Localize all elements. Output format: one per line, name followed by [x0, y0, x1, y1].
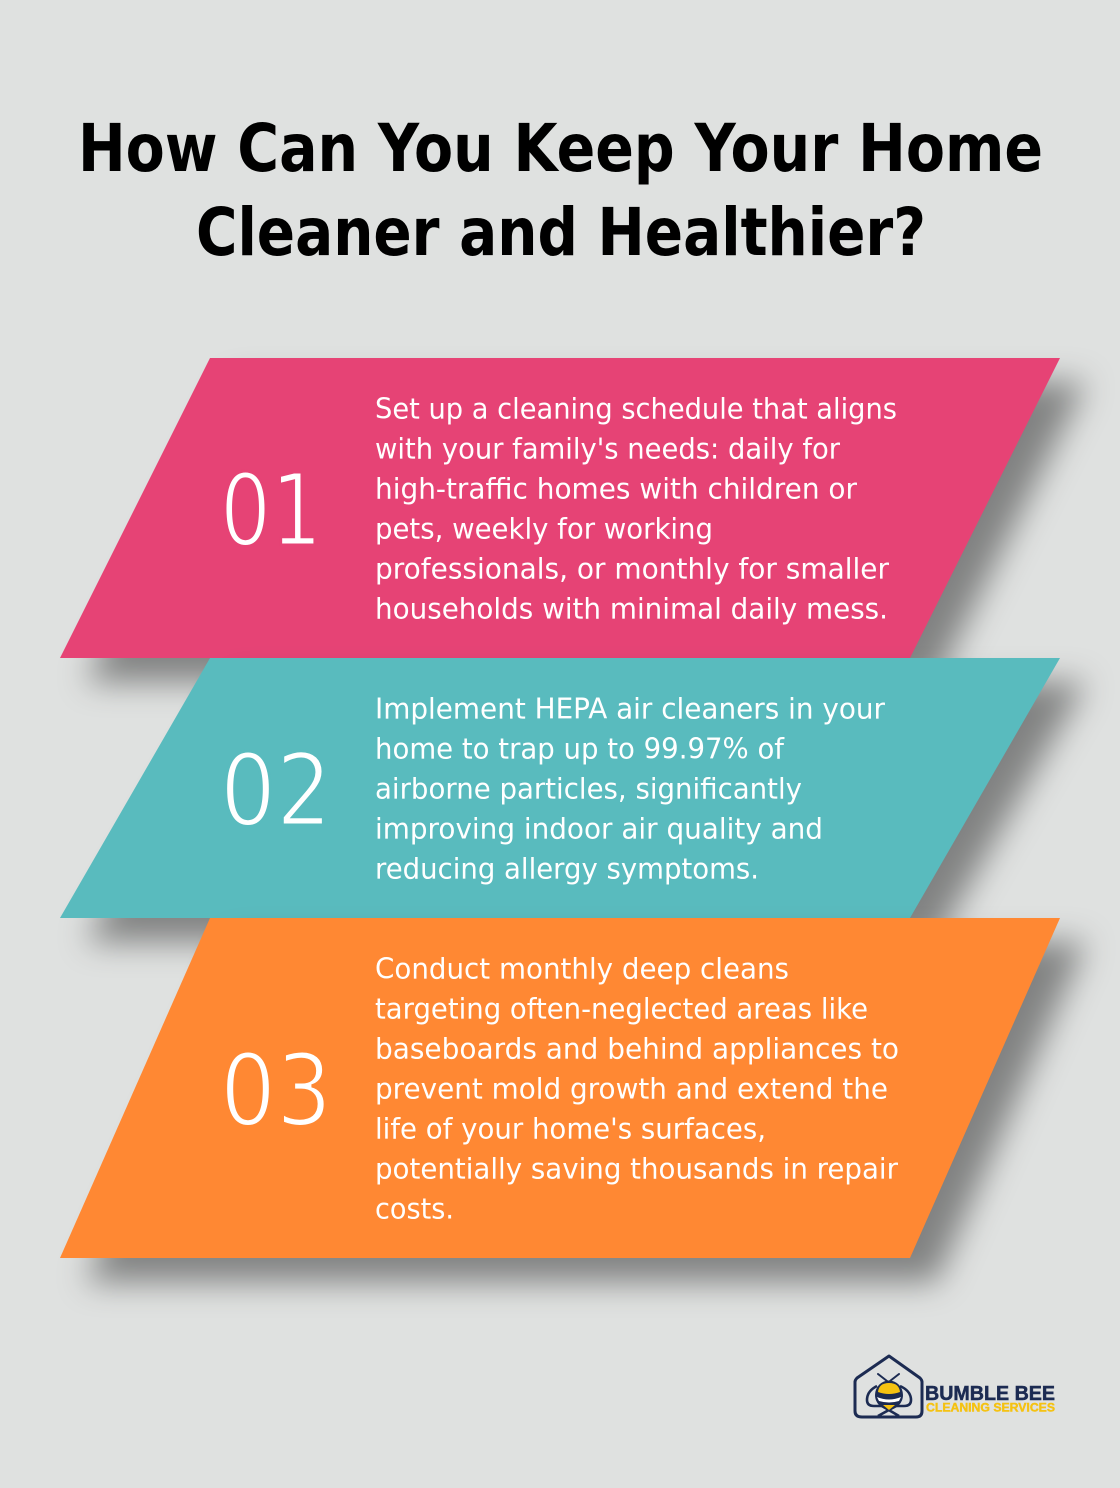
text: step 03: life of your home's surfaces, — [375, 1112, 766, 1146]
text: step 02: home to trap up to 99.97% of — [375, 732, 785, 766]
number 02: 02 — [220, 732, 332, 849]
text: step 01: households with minimal daily mess. — [375, 592, 888, 626]
panel: step 03 — [60, 918, 1086, 1282]
logo: Bumble Bee Cleaning Services — [855, 1356, 1055, 1417]
title: Cleaner and Healthier? — [196, 194, 926, 271]
panel: step 02 — [60, 658, 1086, 942]
number 03: 03 — [220, 1032, 332, 1149]
text: step 02: reducing allergy symptoms. — [375, 852, 759, 886]
text: step 01: high-traffic homes with children or — [375, 472, 857, 506]
panel: step 01 — [60, 358, 1086, 682]
text: step 01: professionals, or monthly for smaller — [375, 552, 889, 586]
text: step 03: Conduct monthly deep cleans — [375, 952, 789, 986]
text: step 03: prevent mold growth and extend the — [375, 1072, 888, 1106]
text: step 01 — [375, 392, 897, 626]
text: step 02: Implement HEPA air cleaners in your — [375, 692, 885, 726]
text: step 01: Set up a cleaning schedule that aligns — [375, 392, 897, 426]
text: step 02: improving indoor air quality and — [375, 812, 823, 846]
number 01: 01 — [220, 452, 322, 569]
title — [78, 110, 1043, 271]
text: step 01: pets, weekly for working — [375, 512, 713, 546]
text: step 03: targeting often-neglected areas like — [375, 992, 868, 1026]
text: step 03: baseboards and behind appliances to — [375, 1032, 899, 1066]
text: step 01: with your family's needs: daily for — [375, 432, 840, 466]
text: step 03: potentially saving thousands in repair — [375, 1152, 898, 1186]
text: step 02 — [375, 692, 885, 886]
icon: house with bee — [855, 1356, 922, 1417]
logo text: BUMBLE BEE — [925, 1383, 1055, 1405]
text: step 03: costs. — [375, 1192, 454, 1226]
text: step 03 — [375, 952, 899, 1226]
logo tagline: CLEANING SERVICES — [926, 1402, 1055, 1414]
text: step 02: airborne particles, significantly — [375, 772, 802, 806]
